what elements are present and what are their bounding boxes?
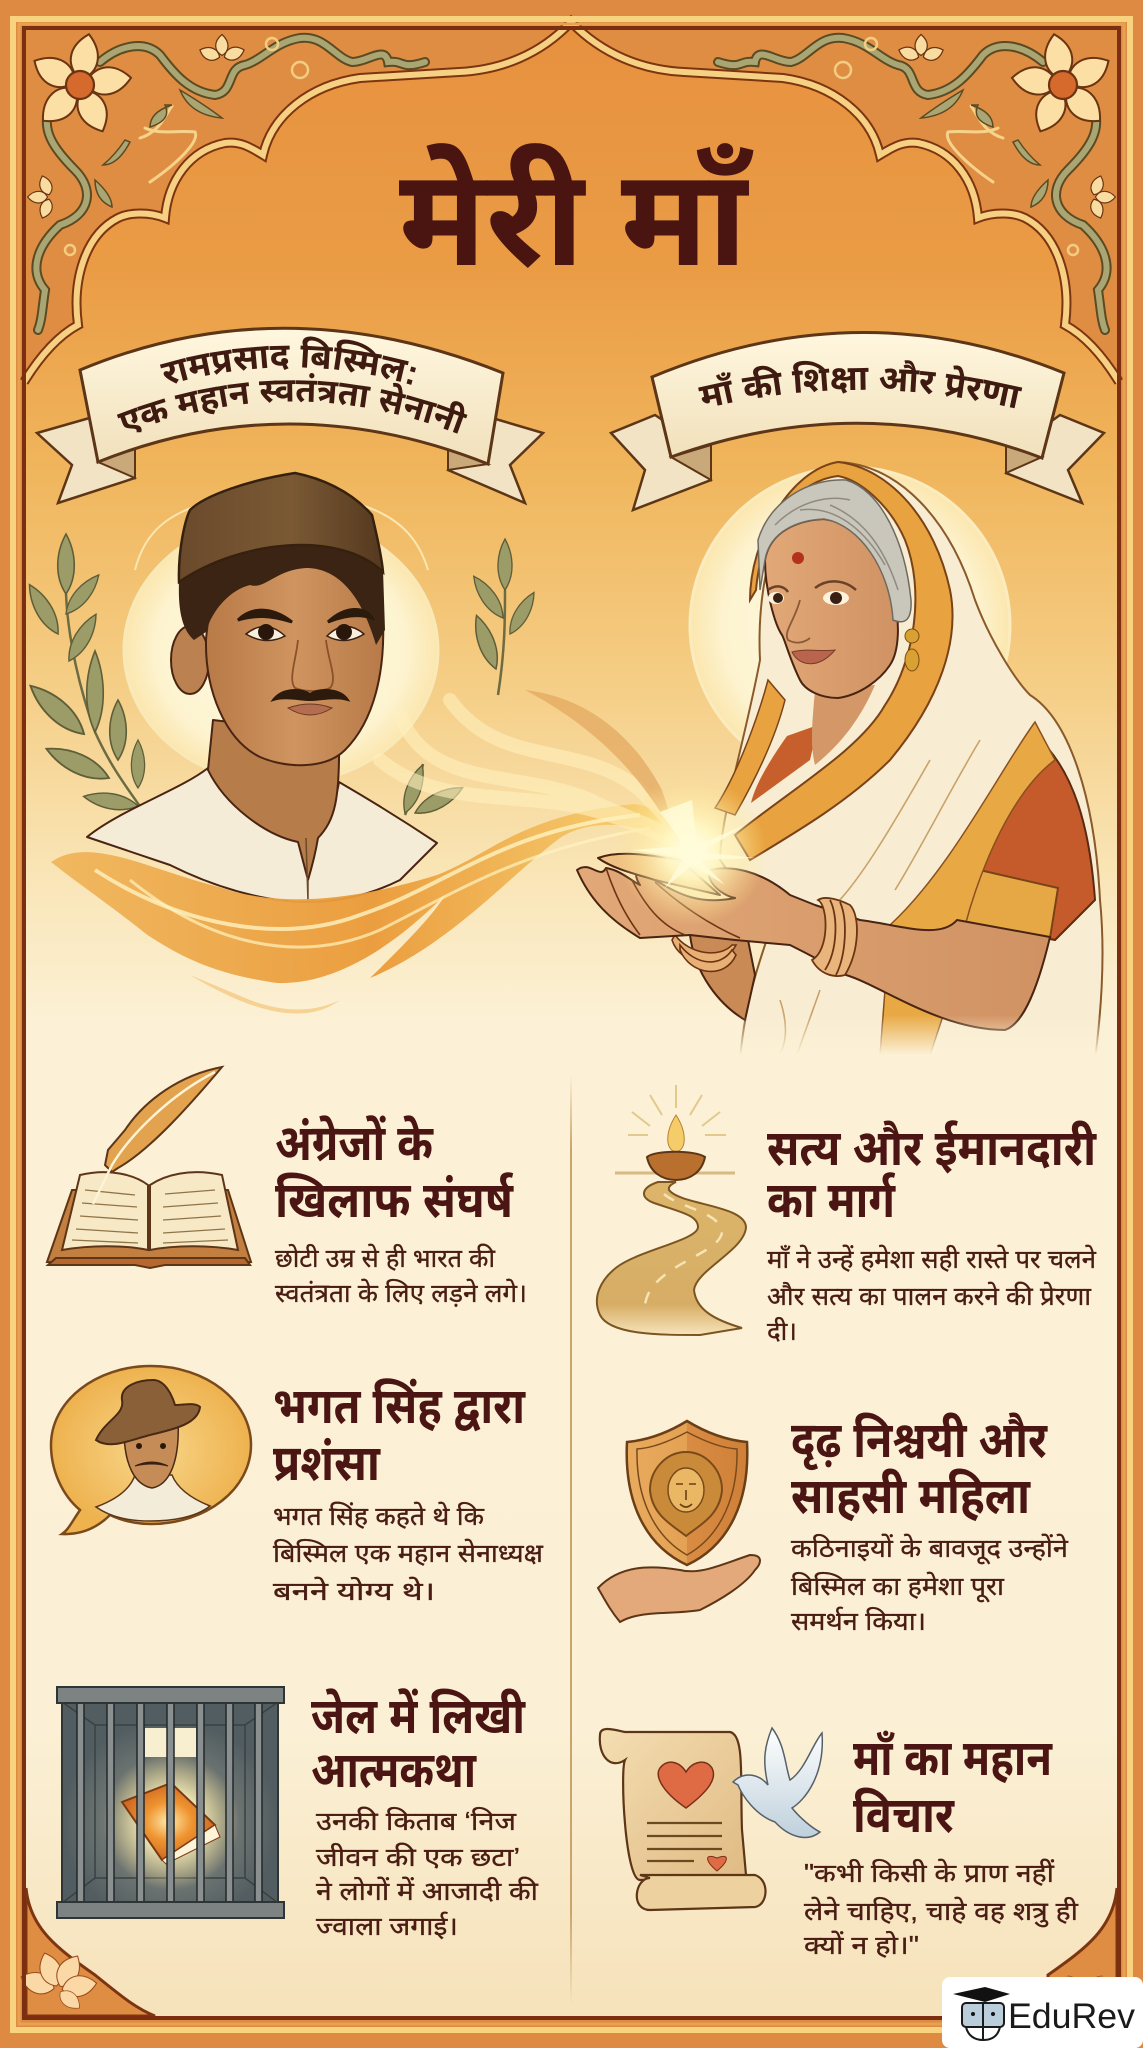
heading line 2: आत्मकथा bbox=[311, 1742, 477, 1798]
body: छोटी उम्र से ही भारत की bbox=[275, 1243, 496, 1273]
body line 3: क्यों न हो।" bbox=[804, 1930, 919, 1960]
body: कठिनाइयों के बावजूद उन्होंने bbox=[791, 1533, 1069, 1564]
right laurel bbox=[398, 539, 540, 820]
far bangles bbox=[672, 935, 736, 971]
body line 3: समर्थन किया। bbox=[791, 1606, 926, 1636]
portrait: Bismil bbox=[23, 473, 540, 902]
sari fade bbox=[720, 1015, 1114, 1065]
banner text: माँ की शिक्षा और प्रेरणा bbox=[698, 360, 1022, 408]
collar placket bbox=[306, 838, 308, 902]
heading line 2: प्रशंसा bbox=[273, 1435, 381, 1491]
heading line 2: का मार्ग bbox=[767, 1172, 896, 1228]
item: mother's great thought bbox=[600, 1728, 1079, 1960]
body line 2: स्वतंत्रता के लिए लड़ने लगे। bbox=[275, 1278, 527, 1308]
heading line 2: विचार bbox=[853, 1787, 955, 1843]
body line 2: जीवन की एक छटा’ bbox=[316, 1842, 520, 1872]
item: autobiography written in jail bbox=[57, 1687, 539, 1941]
hand glow bbox=[617, 776, 767, 926]
hair bbox=[179, 545, 385, 645]
halo bbox=[690, 467, 1010, 783]
icon: diya and winding road bbox=[597, 1085, 746, 1335]
ears bbox=[171, 626, 209, 694]
item: praise by Bhagat Singh bbox=[51, 1366, 543, 1606]
heading line 2: खिलाफ संघर्ष bbox=[275, 1172, 514, 1228]
near bangles bbox=[812, 898, 857, 976]
sari folds bbox=[775, 740, 980, 1060]
title: मेरी माँ bbox=[399, 142, 754, 294]
heading: जेल में लिखी bbox=[311, 1688, 526, 1744]
body: माँ ने उन्हें हमेशा सही रास्ते पर चलने bbox=[767, 1244, 1097, 1274]
body: उनकी किताब ‘निज bbox=[316, 1806, 517, 1836]
heading: अंग्रेजों के bbox=[275, 1115, 434, 1171]
sari border: head and pallu bbox=[735, 462, 952, 860]
hair bbox=[758, 480, 911, 622]
nose, moustache, lips bbox=[273, 640, 348, 715]
face bbox=[765, 519, 898, 698]
shirt bbox=[87, 768, 437, 902]
neck bbox=[208, 720, 339, 880]
banner: Ramprasad Bismil bbox=[34, 326, 546, 506]
banner: mother's teaching bbox=[609, 331, 1106, 512]
left laurel bbox=[23, 534, 145, 813]
item: struggle against the British bbox=[47, 1067, 527, 1308]
body: "कभी किसी के प्राण नहीं bbox=[804, 1858, 1055, 1888]
body line 2: बिस्मिल एक महान सेनाध्यक्ष bbox=[273, 1538, 543, 1568]
logo text: EduRev bbox=[1008, 1997, 1135, 2036]
banner text: एक महान स्वतंत्रता सेनानी bbox=[116, 373, 468, 434]
left veil band bbox=[715, 680, 785, 815]
body line 3: दी। bbox=[767, 1316, 797, 1346]
brows and eyes bbox=[238, 609, 372, 641]
banner text bbox=[116, 336, 468, 434]
body line 3: ने लोगों में आजादी की bbox=[316, 1876, 539, 1906]
far arm bbox=[690, 925, 755, 1020]
icon: graduation cap bbox=[953, 1987, 1010, 2040]
body line 2: बिस्मिल का हमेशा पूरा bbox=[791, 1571, 1005, 1602]
item: path of truth and honesty bbox=[597, 1085, 1097, 1346]
portrait: mother bbox=[577, 462, 1114, 1065]
body: भगत सिंह कहते थे कि bbox=[273, 1501, 485, 1531]
icon: lion shield and hand bbox=[598, 1421, 760, 1622]
face bbox=[206, 544, 383, 765]
icon: scroll with heart and dove bbox=[600, 1728, 822, 1910]
golden flow ribbon bbox=[51, 690, 695, 1014]
body line 4: ज्वाला जगाई। bbox=[316, 1911, 458, 1941]
icon: jail with glowing book bbox=[57, 1687, 284, 1918]
fingers bbox=[606, 868, 740, 938]
blouse bbox=[751, 725, 1095, 940]
halo bbox=[124, 490, 438, 784]
heading: दृढ़ निश्चयी और bbox=[791, 1412, 1048, 1471]
earring bbox=[905, 629, 919, 671]
white sari body bbox=[720, 462, 1103, 1060]
right corner floral ornament bbox=[718, 32, 1115, 330]
icon: speech bubble portrait bbox=[51, 1366, 251, 1534]
bindi, eyes, mouth bbox=[768, 552, 856, 664]
body line 2: लेने चाहिए, चाहे वह शत्रु ही bbox=[804, 1896, 1079, 1927]
left corner floral ornament bbox=[28, 32, 425, 330]
heading: भगत सिंह द्वारा bbox=[273, 1378, 526, 1434]
cap bbox=[179, 473, 383, 582]
central divider bbox=[570, 1075, 572, 2005]
heading: सत्य और ईमानदारी bbox=[767, 1120, 1097, 1176]
bottom corner ornaments bbox=[18, 1888, 1117, 2016]
body line 3: बनने योग्य थे। bbox=[273, 1576, 435, 1606]
heading line 2: साहसी महिला bbox=[791, 1468, 1031, 1524]
heading: माँ का महान bbox=[853, 1730, 1053, 1786]
palm bbox=[598, 854, 720, 895]
EduRev logo bbox=[942, 1977, 1143, 2048]
banner text: रामप्रसाद बिस्मिल: bbox=[160, 336, 416, 385]
neck bbox=[812, 685, 875, 765]
shoulder border bbox=[880, 722, 1055, 1055]
icon: book and quill bbox=[47, 1067, 251, 1268]
body line 2: और सत्य का पालन करने की प्रेरणा bbox=[767, 1281, 1092, 1311]
near arm and hand bbox=[577, 867, 1050, 1030]
arch spandrels bbox=[24, 22, 1119, 382]
item: determined and brave woman bbox=[598, 1412, 1069, 1636]
